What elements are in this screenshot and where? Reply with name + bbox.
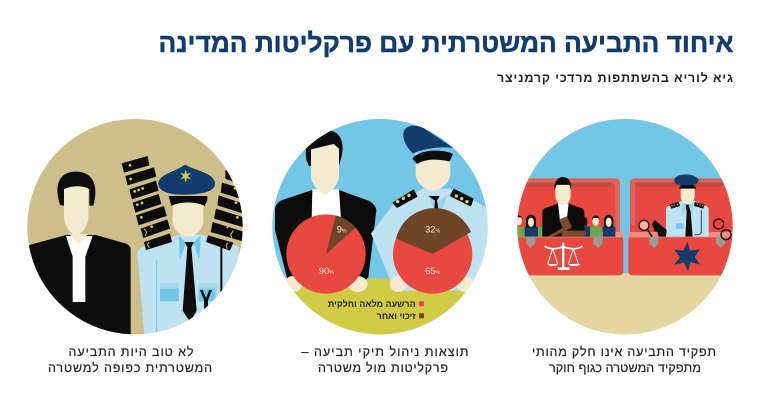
police cap extending beyond the circle [403, 126, 453, 164]
caption: prosecution role: מתפקיד המשטרה כגוף חוקר [549, 361, 701, 375]
pie chart: prosecution by police: 65% [425, 266, 440, 276]
right bench [628, 178, 733, 276]
caption: prosecution subordinate: לא טוב היות התביעה [68, 345, 194, 359]
subtitle: authors: גיא לוריא בהשתתפות מרדכי קרמניצר [497, 71, 733, 85]
title: איחוד התביעה המשטרתית עם פרקליטות המדינה [158, 28, 734, 58]
panel: prosecution subordinate to police [27, 119, 243, 334]
legend [328, 300, 424, 319]
left bench [517, 178, 624, 276]
judge figure [542, 177, 586, 237]
legend: הרשעה מלאה וחלקית [328, 299, 416, 309]
caption: prosecution role [532, 345, 716, 375]
icon: scales of justice [545, 243, 583, 270]
panel: case outcomes pie charts [272, 119, 488, 334]
caption: case outcomes [302, 345, 468, 375]
caption: prosecution role: תפקיד התביעה אינו חלק מהותי [532, 345, 716, 359]
icon: magnifying glass [639, 220, 652, 237]
panel: prosecution and investigation roles [517, 119, 733, 334]
caption: prosecution subordinate: המשטרתית כפופה למשטרה [48, 361, 212, 375]
audience figures [510, 215, 615, 237]
police officer figure [371, 153, 488, 292]
pie chart: prosecution by civil prosecutors [286, 214, 366, 294]
icon: police star emblem [674, 241, 700, 271]
legend: זיכוי ואחר [377, 311, 416, 321]
lawyer figure [29, 172, 131, 334]
icon: gavel [547, 216, 586, 237]
icon: handcuffs [714, 219, 731, 240]
caption: case outcomes: תוצאות ניהול תיקי תביעה – [302, 345, 468, 359]
pie chart: prosecution by civil prosecutors: 9% [337, 225, 347, 235]
microphones [526, 237, 725, 248]
caption: case outcomes: פרקליטות מול משטרה [318, 361, 448, 375]
pie chart: prosecution by civil prosecutors: 90% [319, 266, 334, 276]
caption: prosecution subordinate [48, 345, 212, 375]
rank insignia column right [206, 170, 243, 251]
pie chart: prosecution by police: 32% [425, 225, 440, 235]
rank insignia column left [122, 156, 172, 250]
police officer figure [137, 165, 239, 343]
police officer figure [666, 174, 709, 237]
pie chart: prosecution by police [393, 208, 472, 294]
icon: pistol [652, 220, 667, 237]
civilian prosecutor figure [275, 130, 376, 292]
ground [292, 278, 470, 334]
